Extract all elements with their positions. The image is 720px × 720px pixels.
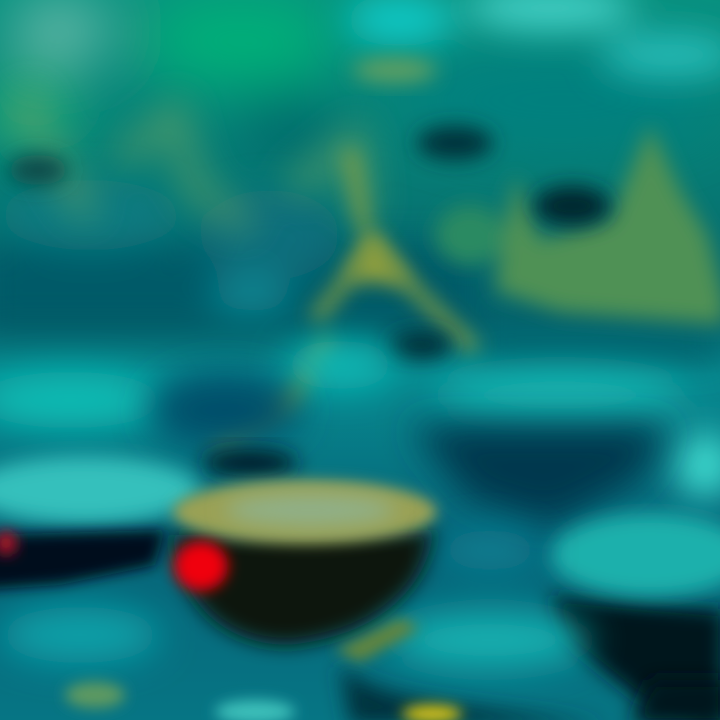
- sky highlights: [345, 0, 720, 77]
- rim highlight: [225, 494, 395, 526]
- central peak: [215, 150, 475, 445]
- floating bowl: right: [550, 513, 720, 720]
- sky glow: [0, 0, 720, 170]
- mountain: left faint ridges: [10, 105, 365, 225]
- floating bowls: dark blue: [150, 372, 670, 525]
- bowl rim left: [0, 456, 200, 524]
- dark holes: [8, 126, 610, 359]
- dark bowl underside: [202, 450, 298, 476]
- floating bowl: center: [172, 480, 437, 645]
- bowl rim center: [173, 480, 437, 544]
- lower dark shape: [340, 665, 720, 720]
- lower accents: [65, 618, 462, 720]
- bowl body right: [550, 595, 720, 720]
- bowl body left: [0, 530, 165, 590]
- floating bowl: left: [0, 456, 200, 590]
- lower water: [0, 530, 590, 668]
- mountain: right green: [435, 125, 720, 325]
- red spot center: [174, 541, 228, 591]
- bowl rim right: [550, 513, 720, 597]
- red spot left: [0, 531, 17, 555]
- dark mid band: [0, 180, 720, 360]
- sky olive streak: [353, 57, 437, 83]
- bowl body center: [172, 530, 435, 645]
- mid water highlights: [0, 341, 720, 497]
